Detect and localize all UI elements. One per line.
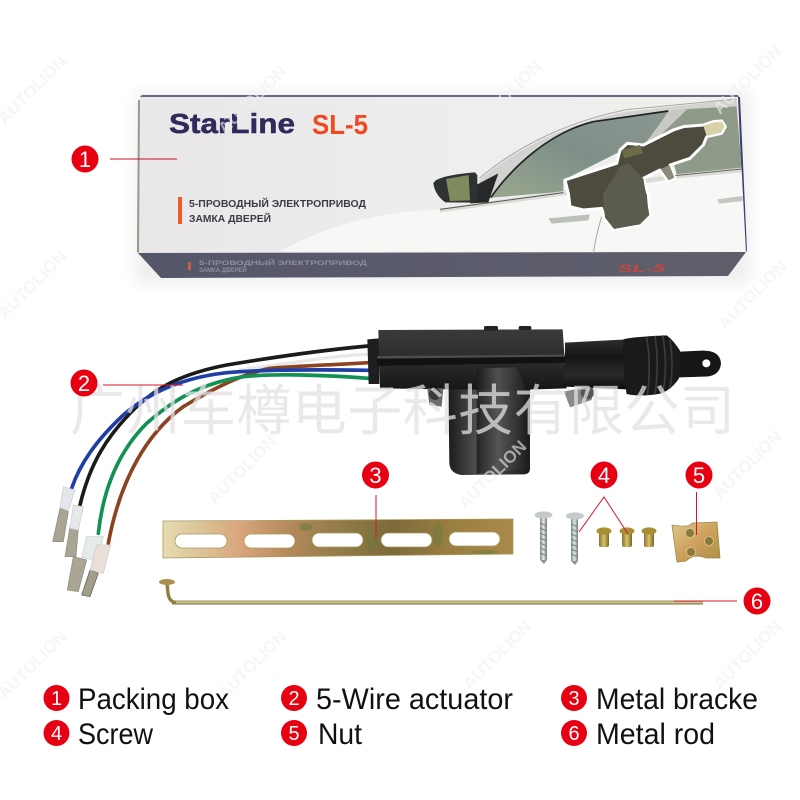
callout 3 (362, 462, 389, 538)
brand name: StarLine (169, 108, 295, 139)
legend: metal bracket: 3 (568, 688, 580, 710)
watermark: repeated brand marks: AUTOLION (469, 57, 545, 133)
terminal: brown (82, 545, 111, 597)
legend: metal rod: 6 (568, 723, 580, 745)
legend: nut: Nut (318, 718, 363, 751)
green wire (98, 375, 368, 533)
window pillar (646, 108, 687, 142)
side SL-5 mark: SL-5 (618, 263, 667, 275)
watermark: repeated brand marks: AUTOLION (459, 617, 535, 693)
legend (44, 683, 758, 751)
metal bracket (163, 519, 513, 558)
orange accent bar (178, 197, 182, 224)
legend: packing box: 1 (51, 688, 62, 710)
legend: screw (44, 718, 153, 751)
white wire (240, 354, 368, 370)
rear door handle (717, 196, 743, 204)
window sill (440, 168, 742, 212)
callout 6 (674, 588, 770, 614)
terminal: blue (53, 487, 75, 542)
wires and terminals (53, 346, 368, 597)
terminal: black (65, 505, 83, 557)
rod eyelet (680, 351, 721, 377)
housing ridge (377, 356, 567, 366)
actuator photo on box (565, 121, 725, 230)
callout 1: 1 (79, 147, 91, 172)
door seam (593, 217, 602, 253)
legend: packing box: Packing box (78, 683, 229, 716)
callout 3: 3 (369, 463, 382, 488)
watermark: repeated brand marks: AUTOLION (214, 62, 290, 138)
screw 2 (566, 512, 584, 565)
mounting screw right (564, 385, 594, 407)
box description: 5-ПРОВОДНЫЙ ЭЛЕКТРОПРИВОД (189, 197, 367, 210)
black wire (80, 346, 368, 505)
legend: screw: Screw (78, 718, 153, 751)
watermark: repeated brand marks: AUTOLION (709, 427, 785, 503)
car illustration (280, 99, 746, 253)
brown wire (108, 363, 368, 543)
watermark: repeated brand marks: AUTOLION (714, 257, 790, 333)
legend: 5-wire actuator: 2 (288, 688, 300, 710)
legend: metal rod: Metal rod (596, 718, 715, 751)
rear window (653, 106, 742, 174)
legend: nut: 5 (288, 723, 300, 745)
callout 2 (70, 370, 183, 396)
boot ribs (647, 335, 672, 395)
side stripe text: ЗАМКА ДВЕРЕЙ (199, 266, 247, 274)
rubber boot (623, 335, 680, 396)
watermark: repeated brand marks: AUTOLION (204, 432, 280, 508)
box description: ЗАМКА ДВЕРЕЙ (189, 212, 271, 225)
callout 4 (579, 462, 628, 534)
output tube (565, 339, 627, 389)
connector block (367, 338, 379, 384)
legend: 5-wire actuator: 5-Wire actuator (316, 683, 513, 716)
callout 6: 6 (751, 589, 763, 614)
callout 1 (72, 146, 177, 172)
mounting screw left (427, 388, 443, 407)
gear housing (378, 329, 567, 390)
motor cylinder (448, 383, 530, 475)
callout 5 (686, 462, 712, 535)
door mirror (433, 172, 498, 203)
screw 1 (534, 511, 552, 564)
bracket patina (299, 522, 499, 554)
housing column (477, 367, 530, 474)
nut plate (672, 522, 720, 562)
callout 5: 5 (693, 463, 705, 488)
door handle (548, 214, 590, 224)
callout 2: 2 (78, 371, 90, 396)
side stripe text (188, 258, 368, 274)
actuator (367, 326, 721, 475)
watermark: repeated brand marks: AUTOLION (709, 617, 785, 693)
box front face (138, 96, 746, 253)
car body highlight (280, 170, 746, 252)
box description (189, 197, 367, 225)
callout 4: 4 (598, 463, 610, 488)
watermark: company name: 广州车樽电子科技有限公司 (70, 380, 735, 442)
side stripe text: 5-ПРОВОДНЫЙ ЭЛЕКТРОПРИВОД (199, 258, 368, 267)
box top edge (140, 95, 739, 97)
metal rod (159, 579, 703, 604)
legend: nut (281, 718, 363, 751)
packing box (135, 92, 750, 284)
watermark: repeated brand marks: AUTOLION (709, 42, 785, 118)
legend: screw: 4 (51, 723, 62, 745)
model name: SL-5 (312, 109, 368, 140)
watermark: repeated brand marks: AUTOLION (214, 627, 290, 703)
box right edge (738, 97, 747, 252)
blue wire (72, 370, 368, 488)
box left flap (137, 100, 140, 253)
small brass screws (596, 527, 656, 547)
window chrome (478, 100, 737, 195)
front window (492, 112, 668, 198)
terminal: green (67, 537, 103, 592)
top tabs (484, 326, 531, 331)
watermark: repeated brand marks: AUTOLION (454, 437, 530, 513)
box lower side (138, 252, 746, 278)
legend: metal bracket: Metal bracke (596, 683, 758, 716)
